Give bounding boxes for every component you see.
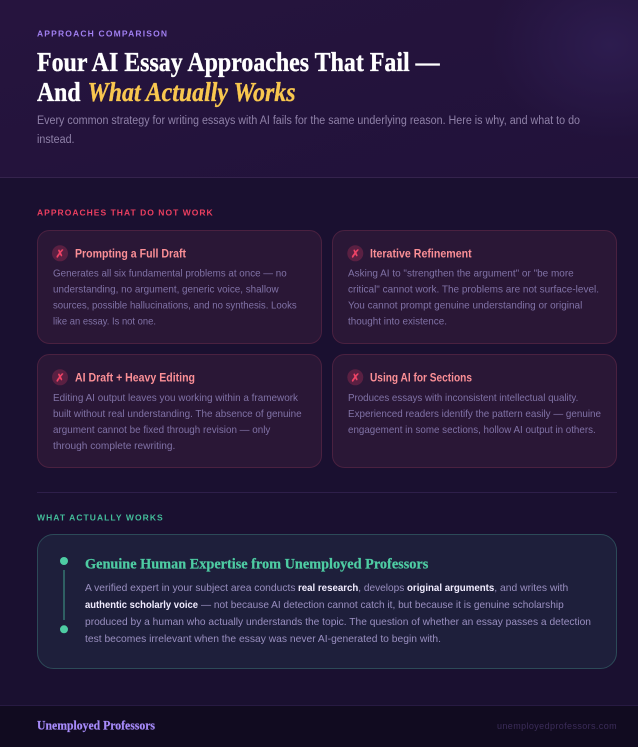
card text: sources, possible hallucinations, and no synthesis. Looks [53,300,297,312]
card title: AI Draft + Heavy Editing [75,372,195,384]
card text: You cannot prompt genuine understanding or original [348,300,582,312]
card text [53,392,302,452]
card text: Generates all six fundamental problems at once — no [53,268,287,280]
icon: cross: ✗ [55,371,65,384]
panel text: , and writes with [494,582,568,594]
card title: Using AI for Sections [370,372,472,384]
card text: built without real understanding. The absence of genuine [53,408,302,420]
card text: through complete rewriting. [53,440,175,452]
card text: Experienced readers identify the pattern easily — genuine [348,408,601,420]
panel: ai draft + heavy editing [38,354,322,468]
panel text: A verified expert in your subject area conducts [85,582,296,594]
card text: critical" cannot work. The problems are not surface-level. [348,284,599,296]
panel text: test becomes irrelevant when the essay was never AI-generated to begin with. [85,633,441,645]
footer url: unemployedprofessors.com [497,721,617,731]
footer brand: Unemployed Professors [37,718,155,732]
title: And [37,77,81,107]
heading: what actually works: WHAT ACTUALLY WORKS [37,513,163,523]
header [0,0,638,178]
panel text: authentic scholarly voice [85,599,198,611]
panel text: produced by a human who actually understands the topic. The question of whether an essay passes a detection [85,616,591,628]
title [37,47,440,107]
card title: Iterative Refinement [370,248,472,260]
heading: approaches that do not work: APPROACHES THAT DO NOT WORK [37,208,214,218]
card text: thought into existence. [348,316,447,328]
panel: using ai for sections [332,354,616,468]
panel text: — not because AI detection cannot catch it, but because it is genuine scholarship [201,599,564,611]
subtitle: Every common strategy for writing essays with AI fails for the same underlying reason. Here is why, and what to do [37,115,580,127]
panel: genuine human expertise [38,534,616,668]
icon: cross: ✗ [55,247,65,260]
icon: cross [52,245,68,261]
icon: cross [52,369,68,385]
icon: cross: ✗ [351,247,360,260]
footer [0,705,638,747]
panel text: original arguments [407,582,494,594]
panel text: real research [298,582,358,594]
icon: timeline marker [60,557,68,633]
card text: like an essay. Is not one. [53,316,156,328]
card title: Prompting a Full Draft [75,248,186,260]
panel title: Genuine Human Expertise from Unemployed Professors [85,556,428,572]
card text [348,392,601,436]
subtitle [37,115,580,146]
panel text [85,582,591,645]
card text [348,268,599,328]
eyebrow: APPROACH COMPARISON [37,29,167,39]
icon: cross [347,369,363,385]
card text [53,268,297,328]
card text: Asking AI to "strengthen the argument" or "be more [348,268,574,280]
card text: Produces essays with inconsistent intellectual quality. [348,392,578,404]
panel text: , develops [358,582,404,594]
card text: engagement in some sections, hollow AI output in others. [348,424,596,436]
icon: cross: ✗ [351,371,360,384]
panel: prompting a full draft [38,230,322,344]
card text: understanding, no argument, generic voice, shallow [53,284,279,296]
title: What Actually Works [88,77,296,107]
icon: cross [347,245,363,261]
card text: Editing AI output leaves you working within a framework [53,392,299,404]
title: Four AI Essay Approaches That Fail — [37,47,440,77]
panel: iterative refinement [332,230,616,344]
card text: argument cannot be fixed through revision — only [53,424,271,436]
subtitle: instead. [37,134,74,146]
